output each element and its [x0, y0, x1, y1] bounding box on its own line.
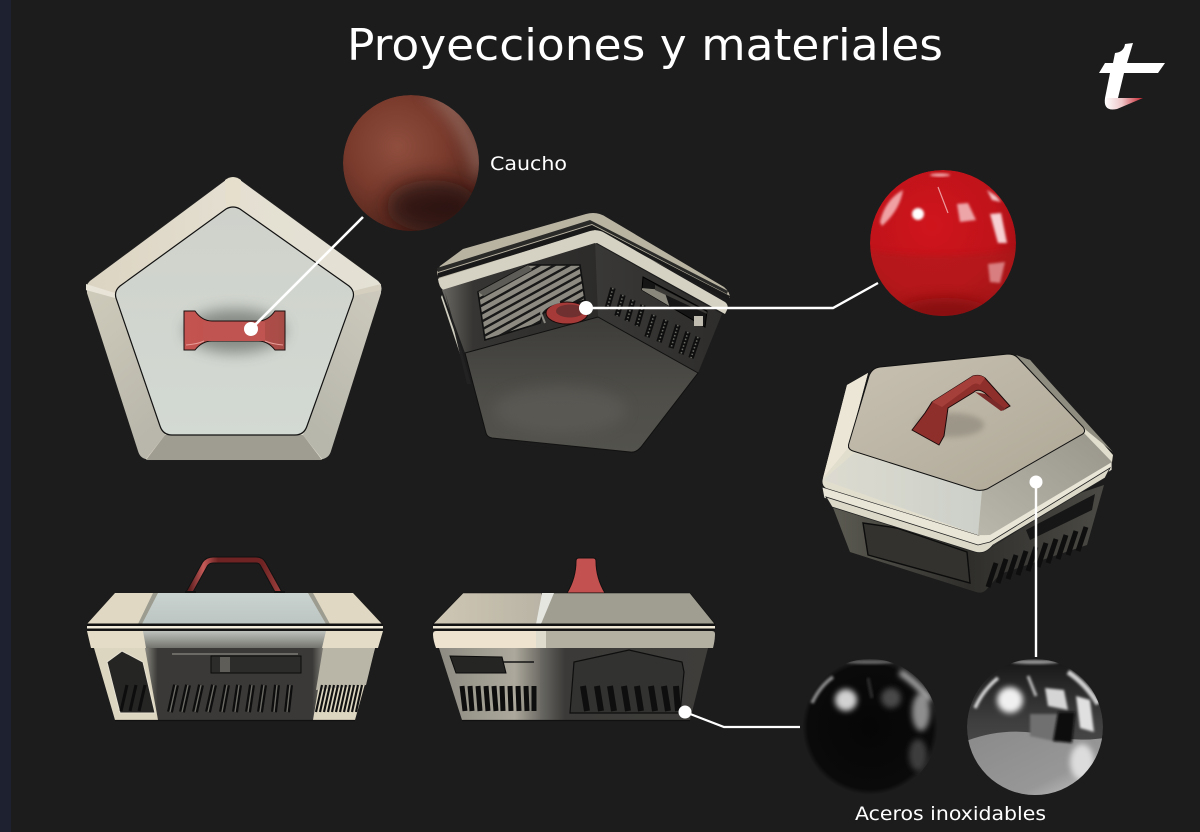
- panel: bottom perspective view: [437, 213, 730, 452]
- title: Proyecciones y materiales: [347, 20, 943, 71]
- body: [94, 648, 375, 720]
- side panel: [570, 650, 684, 713]
- sphere: polished steel: [966, 659, 1105, 800]
- bottom face: [465, 317, 698, 452]
- inner lid face: [116, 207, 354, 435]
- vent: left louver window: [478, 265, 585, 340]
- label: Aceros inoxidables: Aceros inoxidables: [855, 803, 1046, 825]
- band: [87, 631, 383, 648]
- callout: steel line to front view: [678, 706, 800, 727]
- panel: front view with red knob: [433, 558, 715, 720]
- callout: steel line to cover: [1030, 476, 1042, 657]
- handle: red top view: [184, 311, 285, 350]
- window: [450, 656, 506, 673]
- left pocket: [107, 651, 155, 713]
- slots: [170, 685, 290, 712]
- slots: [462, 686, 534, 711]
- sphere: glossy red material: [870, 170, 1016, 316]
- sphere: rubber material: [343, 95, 479, 231]
- window right wall: [642, 277, 707, 327]
- sphere: black steel: [802, 659, 938, 795]
- callout: rubber line to handle: [244, 217, 363, 336]
- body: [439, 648, 540, 720]
- body window: [863, 523, 970, 583]
- body vents: [988, 527, 1086, 587]
- top lid edge: [437, 213, 730, 298]
- cover: [87, 593, 382, 624]
- case body: [832, 485, 1104, 593]
- cover: [433, 593, 542, 624]
- wall left: [442, 243, 598, 353]
- vent slots right wall: [607, 288, 698, 358]
- rim band: [438, 230, 728, 314]
- panel: isometric view with handle: [822, 354, 1113, 593]
- red rubber foot: [546, 302, 588, 324]
- handle: red lifted: [912, 375, 1010, 445]
- label: Caucho: Caucho: [490, 153, 567, 175]
- icon: brand logo: [1099, 43, 1165, 110]
- wall right: [595, 243, 722, 373]
- body window: [211, 656, 301, 673]
- knob: [567, 558, 605, 593]
- panel: top view of pentagon case: [86, 177, 382, 460]
- panel: front view with arched handle: [87, 560, 383, 720]
- cover sides: [822, 358, 1113, 536]
- callout: red sphere to foot: [579, 283, 878, 315]
- band: [433, 631, 540, 648]
- rim: [822, 460, 1112, 548]
- handle arch: [189, 560, 279, 593]
- lid top: [848, 354, 1085, 490]
